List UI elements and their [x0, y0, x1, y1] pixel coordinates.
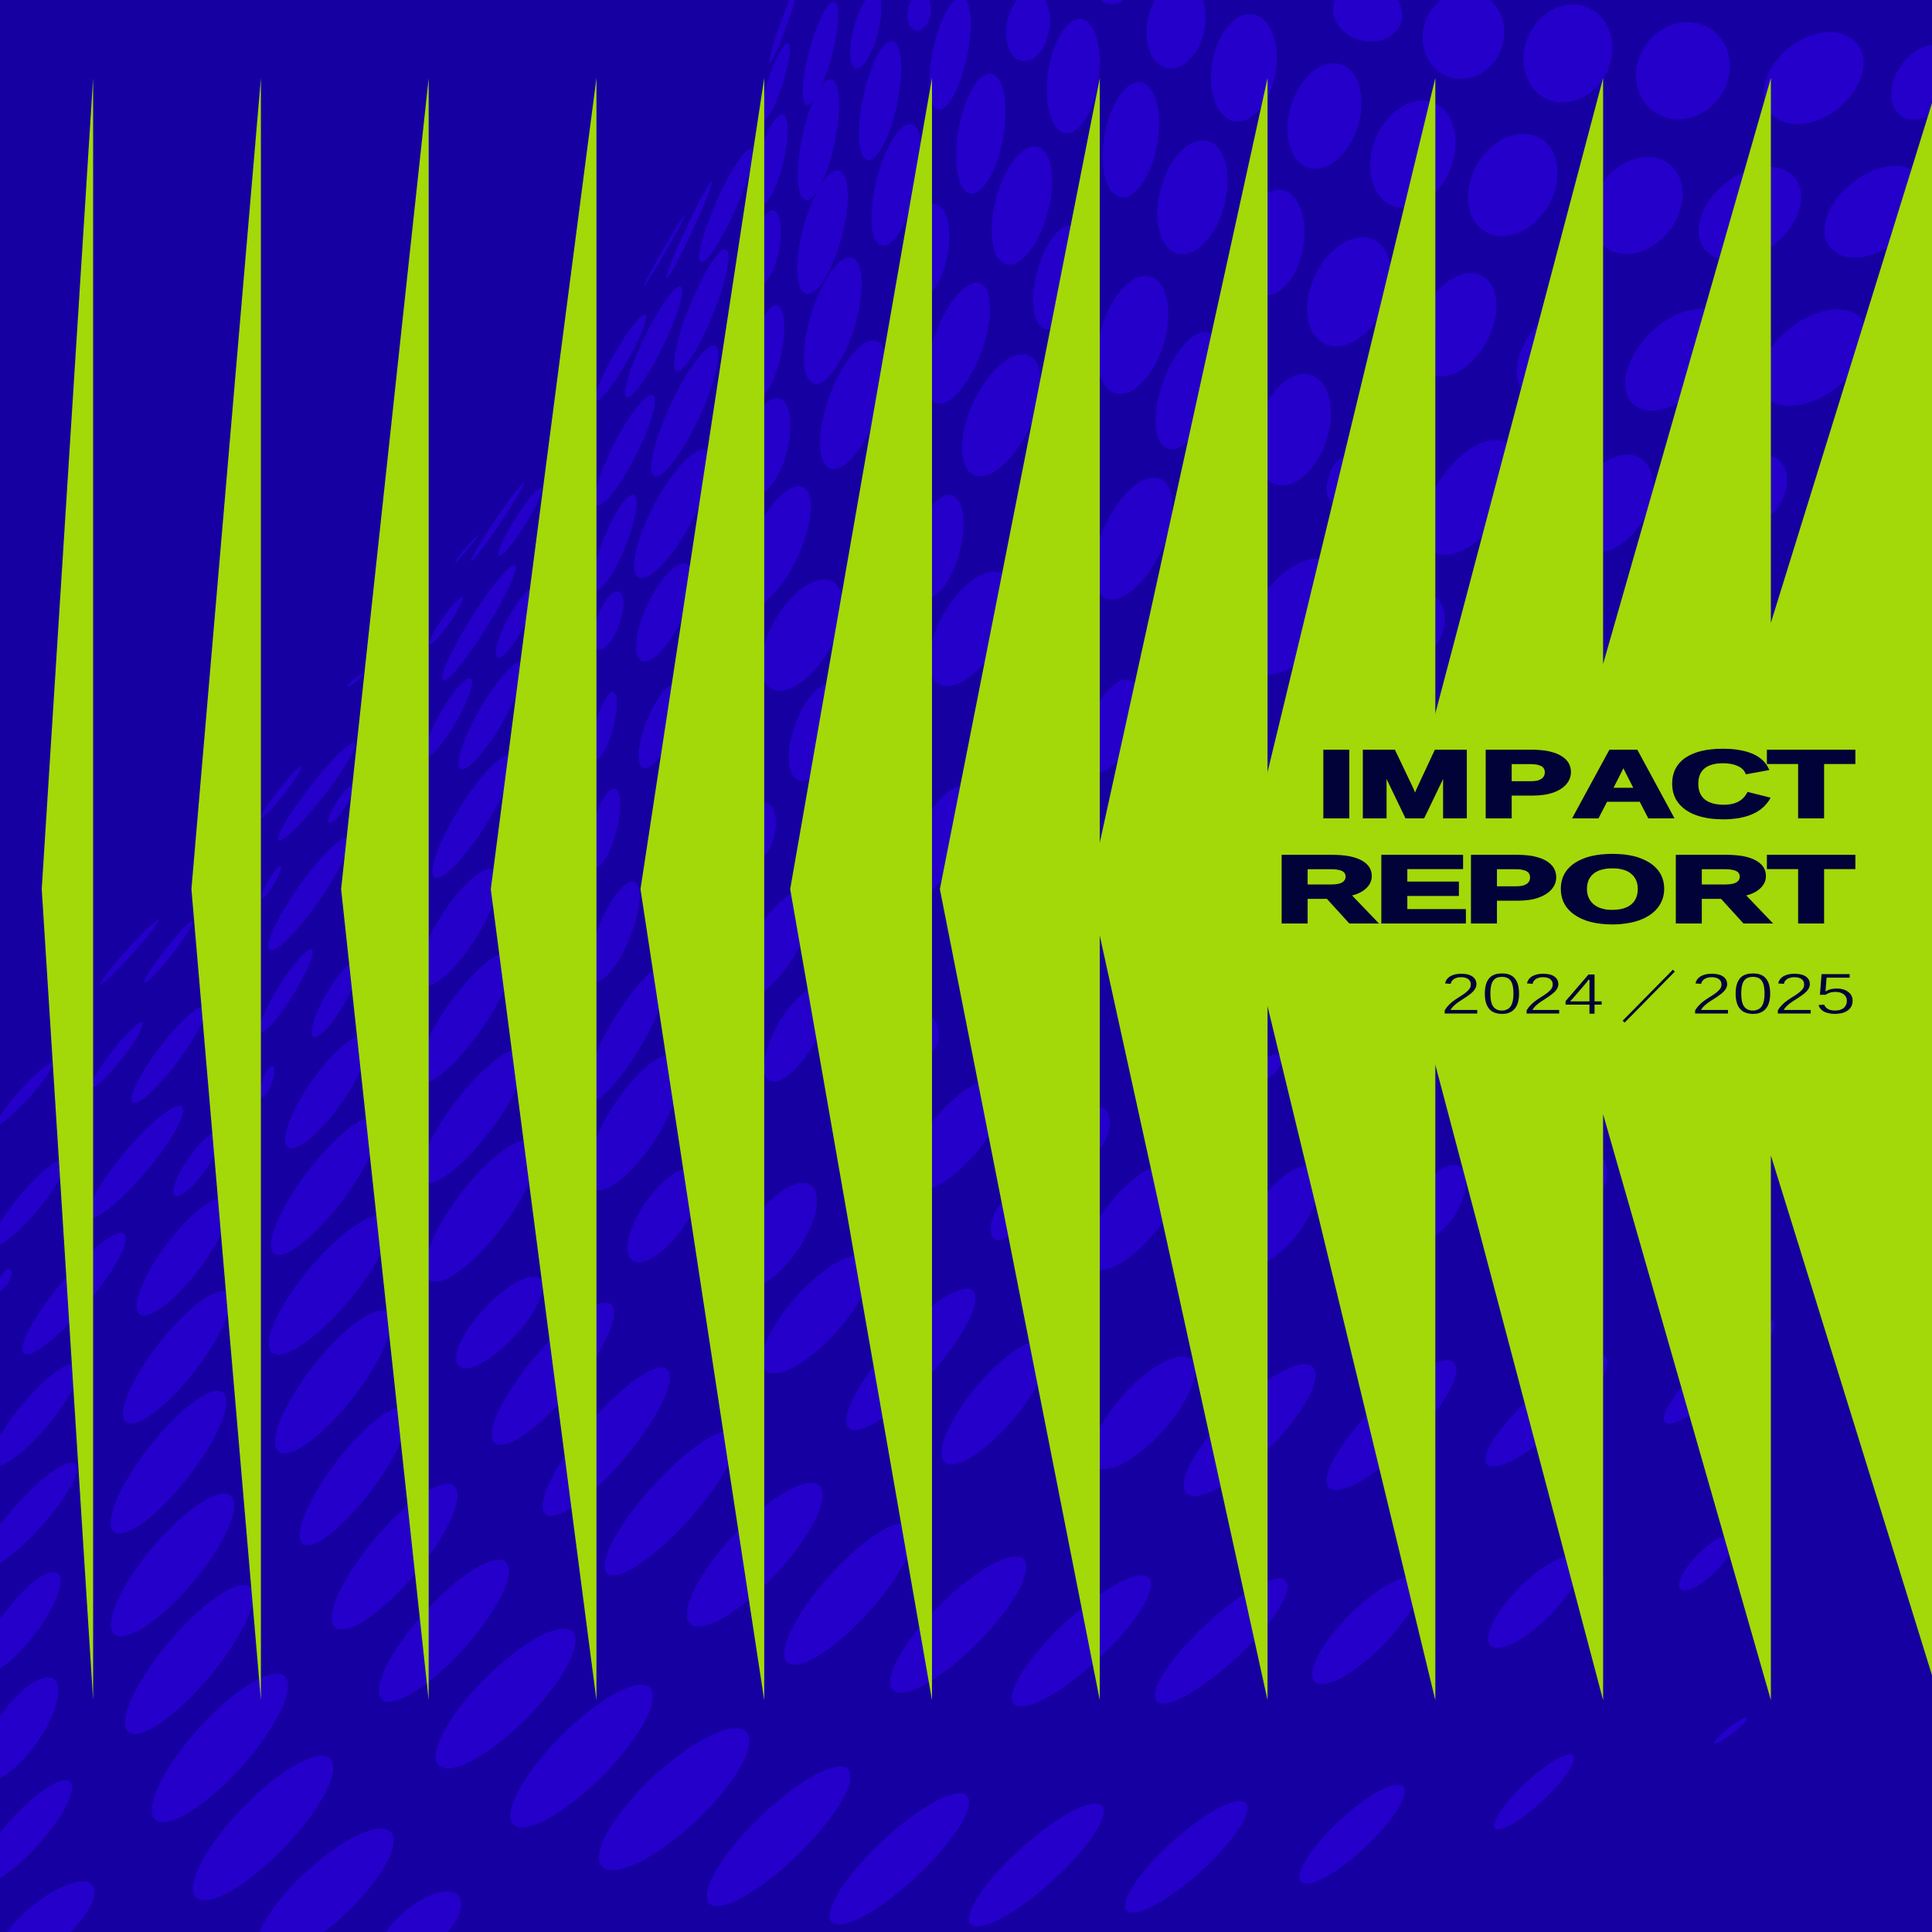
spike 1	[42, 78, 93, 1700]
spike 9	[1240, 78, 1435, 1700]
title block	[1275, 731, 1856, 1026]
spike 6	[790, 78, 932, 1700]
spike 12	[1689, 78, 1932, 1700]
spike 3	[341, 78, 429, 1700]
year: 2025: 2025	[1691, 961, 1856, 1026]
spike 7	[940, 78, 1100, 1700]
spike 11	[1539, 78, 1771, 1700]
spike 10	[1389, 78, 1603, 1700]
title: report: REPORT	[1275, 836, 1854, 942]
spike 5	[641, 78, 764, 1700]
spike 2	[192, 78, 261, 1700]
spike 4	[491, 78, 597, 1700]
slash divider	[1624, 971, 1674, 1022]
spike 8	[1090, 78, 1267, 1700]
year: 2024: 2024	[1440, 961, 1604, 1026]
title: impact: IMPACT	[1317, 731, 1854, 837]
